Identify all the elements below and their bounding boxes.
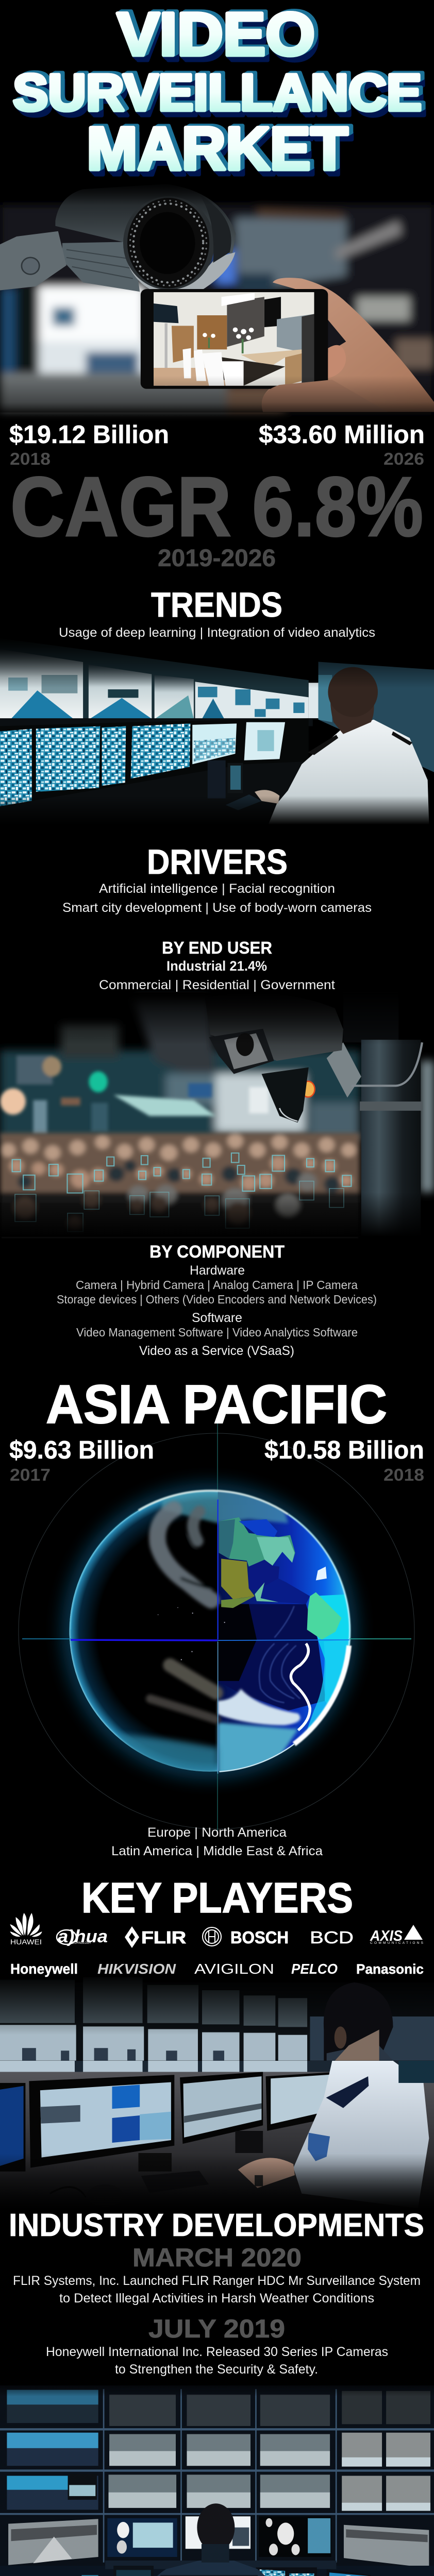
video wall (0, 638, 319, 719)
blurred room (0, 205, 434, 413)
text: trends list: Usage of deep learning | Integration of video analytics (59, 625, 375, 640)
keyboard (226, 794, 261, 810)
stat: market value 2026: 2026 (383, 449, 424, 468)
photo: crowd under camera (0, 992, 434, 1237)
text: end user segments (99, 958, 335, 992)
face detection boxes (12, 1153, 351, 1193)
globe (19, 1422, 414, 1834)
text: component segments: Video Management Software | Video Analytics Software (76, 1326, 358, 1339)
photo: control room operator (0, 638, 434, 825)
logo: Axis: COMMUNICATIONS (370, 1941, 424, 1945)
thumb (262, 380, 388, 412)
pole (327, 992, 422, 1236)
stat: CAGR: 2019-2026 (158, 544, 276, 571)
logo: Panasonic: Panasonic (356, 1961, 424, 1977)
heading: industry developments: INDUSTRY DEVELOPMENTS (9, 2208, 424, 2243)
logo: Hikvision: HIKVISION (97, 1961, 176, 1977)
development: July 2019: Honeywell International Inc. Released 30 Series IP Cameras (46, 2345, 388, 2359)
text: other regions: Latin America | Middle East & Africa (111, 1844, 323, 1858)
stat: asia pacific 2017: $9.63 Billion (9, 1436, 154, 1464)
text: drivers list: Smart city development | Use of body-worn cameras (62, 901, 372, 915)
development: March 2020: to Detect Illegal Activities in Harsh Weather Conditions (59, 2291, 374, 2306)
left column (7, 2390, 98, 2565)
logo: FLIR: FLIR (141, 1928, 186, 1947)
night band right (228, 1604, 325, 1710)
logo: Bosch: BOSCH (230, 1928, 289, 1947)
desk (0, 2072, 434, 2208)
crosshair in globe (216, 1500, 220, 1639)
title: VIDEO (117, 1, 315, 69)
photo: security camera and phone (0, 181, 434, 413)
text: other regions (111, 1825, 323, 1858)
heading: key players: KEY PLAYERS (81, 1874, 353, 1922)
photo: operator with monitors (0, 1974, 434, 2210)
hand fold (328, 345, 346, 378)
text: component segments: Video as a Service (VSaaS) (139, 1344, 294, 1358)
development: July 2019 (46, 2314, 388, 2377)
text: other regions: Europe | North America (147, 1825, 287, 1840)
day side (218, 1489, 352, 1774)
development: July 2019: JULY 2019 (148, 2314, 285, 2343)
text: drivers list (62, 882, 372, 915)
swirl lines (259, 1606, 300, 1703)
keyboard (141, 2171, 209, 2193)
heading: drivers: DRIVERS (147, 842, 288, 882)
logo: Axis: AXIS (370, 1928, 403, 1944)
monitors (0, 2083, 25, 2172)
text: component segments: Hardware (190, 1263, 245, 1278)
stat: asia pacific 2018 (264, 1436, 424, 1484)
heading: trends: TRENDS (151, 585, 282, 624)
stat: asia pacific 2018: 2018 (383, 1465, 424, 1484)
text: component segments: Camera | Hybrid Camera | Analog Camera | IP Camera (76, 1278, 358, 1292)
logo: Pelco: PELCO (291, 1961, 338, 1977)
logo: Huawei: HUAWEI (10, 1938, 42, 1946)
stat: asia pacific 2017: 2017 (10, 1465, 51, 1484)
title: MARKET (87, 115, 348, 183)
night clouds (150, 1510, 216, 1719)
heading: asia pacific: ASIA PACIFIC (46, 1374, 387, 1435)
mouse (87, 2184, 123, 2207)
blurred crowd (0, 1133, 360, 1237)
stars (158, 1607, 225, 1660)
text: component segments (57, 1263, 377, 1358)
text: end user segments: Industrial 21.4% (166, 958, 267, 974)
photo fade into stats (0, 402, 434, 433)
right column (342, 2391, 430, 2568)
logo: Avigilon: AVIGILON (194, 1961, 274, 1977)
stat: market value 2018: 2018 (10, 449, 51, 468)
bright rim (71, 1490, 350, 1772)
operator (255, 667, 429, 824)
development: July 2019: to Strengthen the Security & Safety. (115, 2362, 318, 2377)
horizontal crosshair (22, 1639, 411, 1640)
development: March 2020: MARCH 2020 (132, 2243, 302, 2272)
stat: market value 2026: $33.60 Million (259, 421, 425, 449)
logo: Honeywell: Honeywell (10, 1961, 78, 1977)
logo: Dahua: a)hua (58, 1927, 108, 1946)
desk (0, 761, 305, 824)
camera (205, 993, 343, 1123)
right wall (319, 662, 434, 772)
logo: Bosch (203, 1927, 289, 1947)
text: end user segments: Commercial | Residential | Government (99, 978, 335, 992)
logo: BCD: BCD (310, 1928, 354, 1947)
centre columns (109, 2395, 330, 2508)
camera (55, 184, 236, 253)
text: drivers list: Artificial intelligence | Facial recognition (99, 882, 335, 896)
grid frame (0, 2389, 434, 2563)
stat: market value 2018: $19.12 Billion (9, 421, 169, 449)
phone (141, 289, 328, 389)
logo: Axis (370, 1925, 424, 1945)
logo: Dahua: TECHNOLOGY (71, 1942, 91, 1945)
stat: asia pacific 2018: $10.58 Billion (264, 1436, 424, 1464)
operator head (197, 2503, 235, 2563)
monitors (0, 718, 313, 814)
stat: market value 2018 (9, 421, 169, 468)
logo: Huawei (10, 1913, 42, 1946)
logo: FLIR (125, 1926, 186, 1948)
shirt of operator (238, 2061, 434, 2208)
stat: market value 2026 (259, 421, 425, 468)
hand (262, 278, 434, 412)
upper wall screens (0, 1977, 434, 2061)
title (13, 1, 422, 183)
text: component segments: Storage devices | Others (Video Encoders and Network Devices) (57, 1293, 377, 1306)
operator silhouette (133, 2561, 293, 2576)
stat: asia pacific 2017 (9, 1436, 154, 1484)
development: March 2020: FLIR Systems, Inc. Launched FLIR Ranger HDC Mr Surveillance System (13, 2274, 421, 2288)
head of operator (324, 1982, 393, 2061)
heading: by end user: BY END USER (162, 938, 272, 957)
blurred street (0, 998, 434, 1192)
logos: key players (10, 1913, 424, 1977)
traffic light (302, 1081, 315, 1097)
bottom row screens (107, 2516, 331, 2557)
operator desk (0, 2561, 434, 2576)
heading: by component: BY COMPONENT (149, 1242, 285, 1262)
photo: wall of monitors (0, 2385, 434, 2576)
polar cap (162, 1489, 288, 1523)
title: SURVEILLANCE (13, 64, 422, 122)
development: March 2020 (13, 2243, 421, 2306)
northern land (219, 1517, 295, 1567)
text: component segments: Software (192, 1311, 242, 1325)
